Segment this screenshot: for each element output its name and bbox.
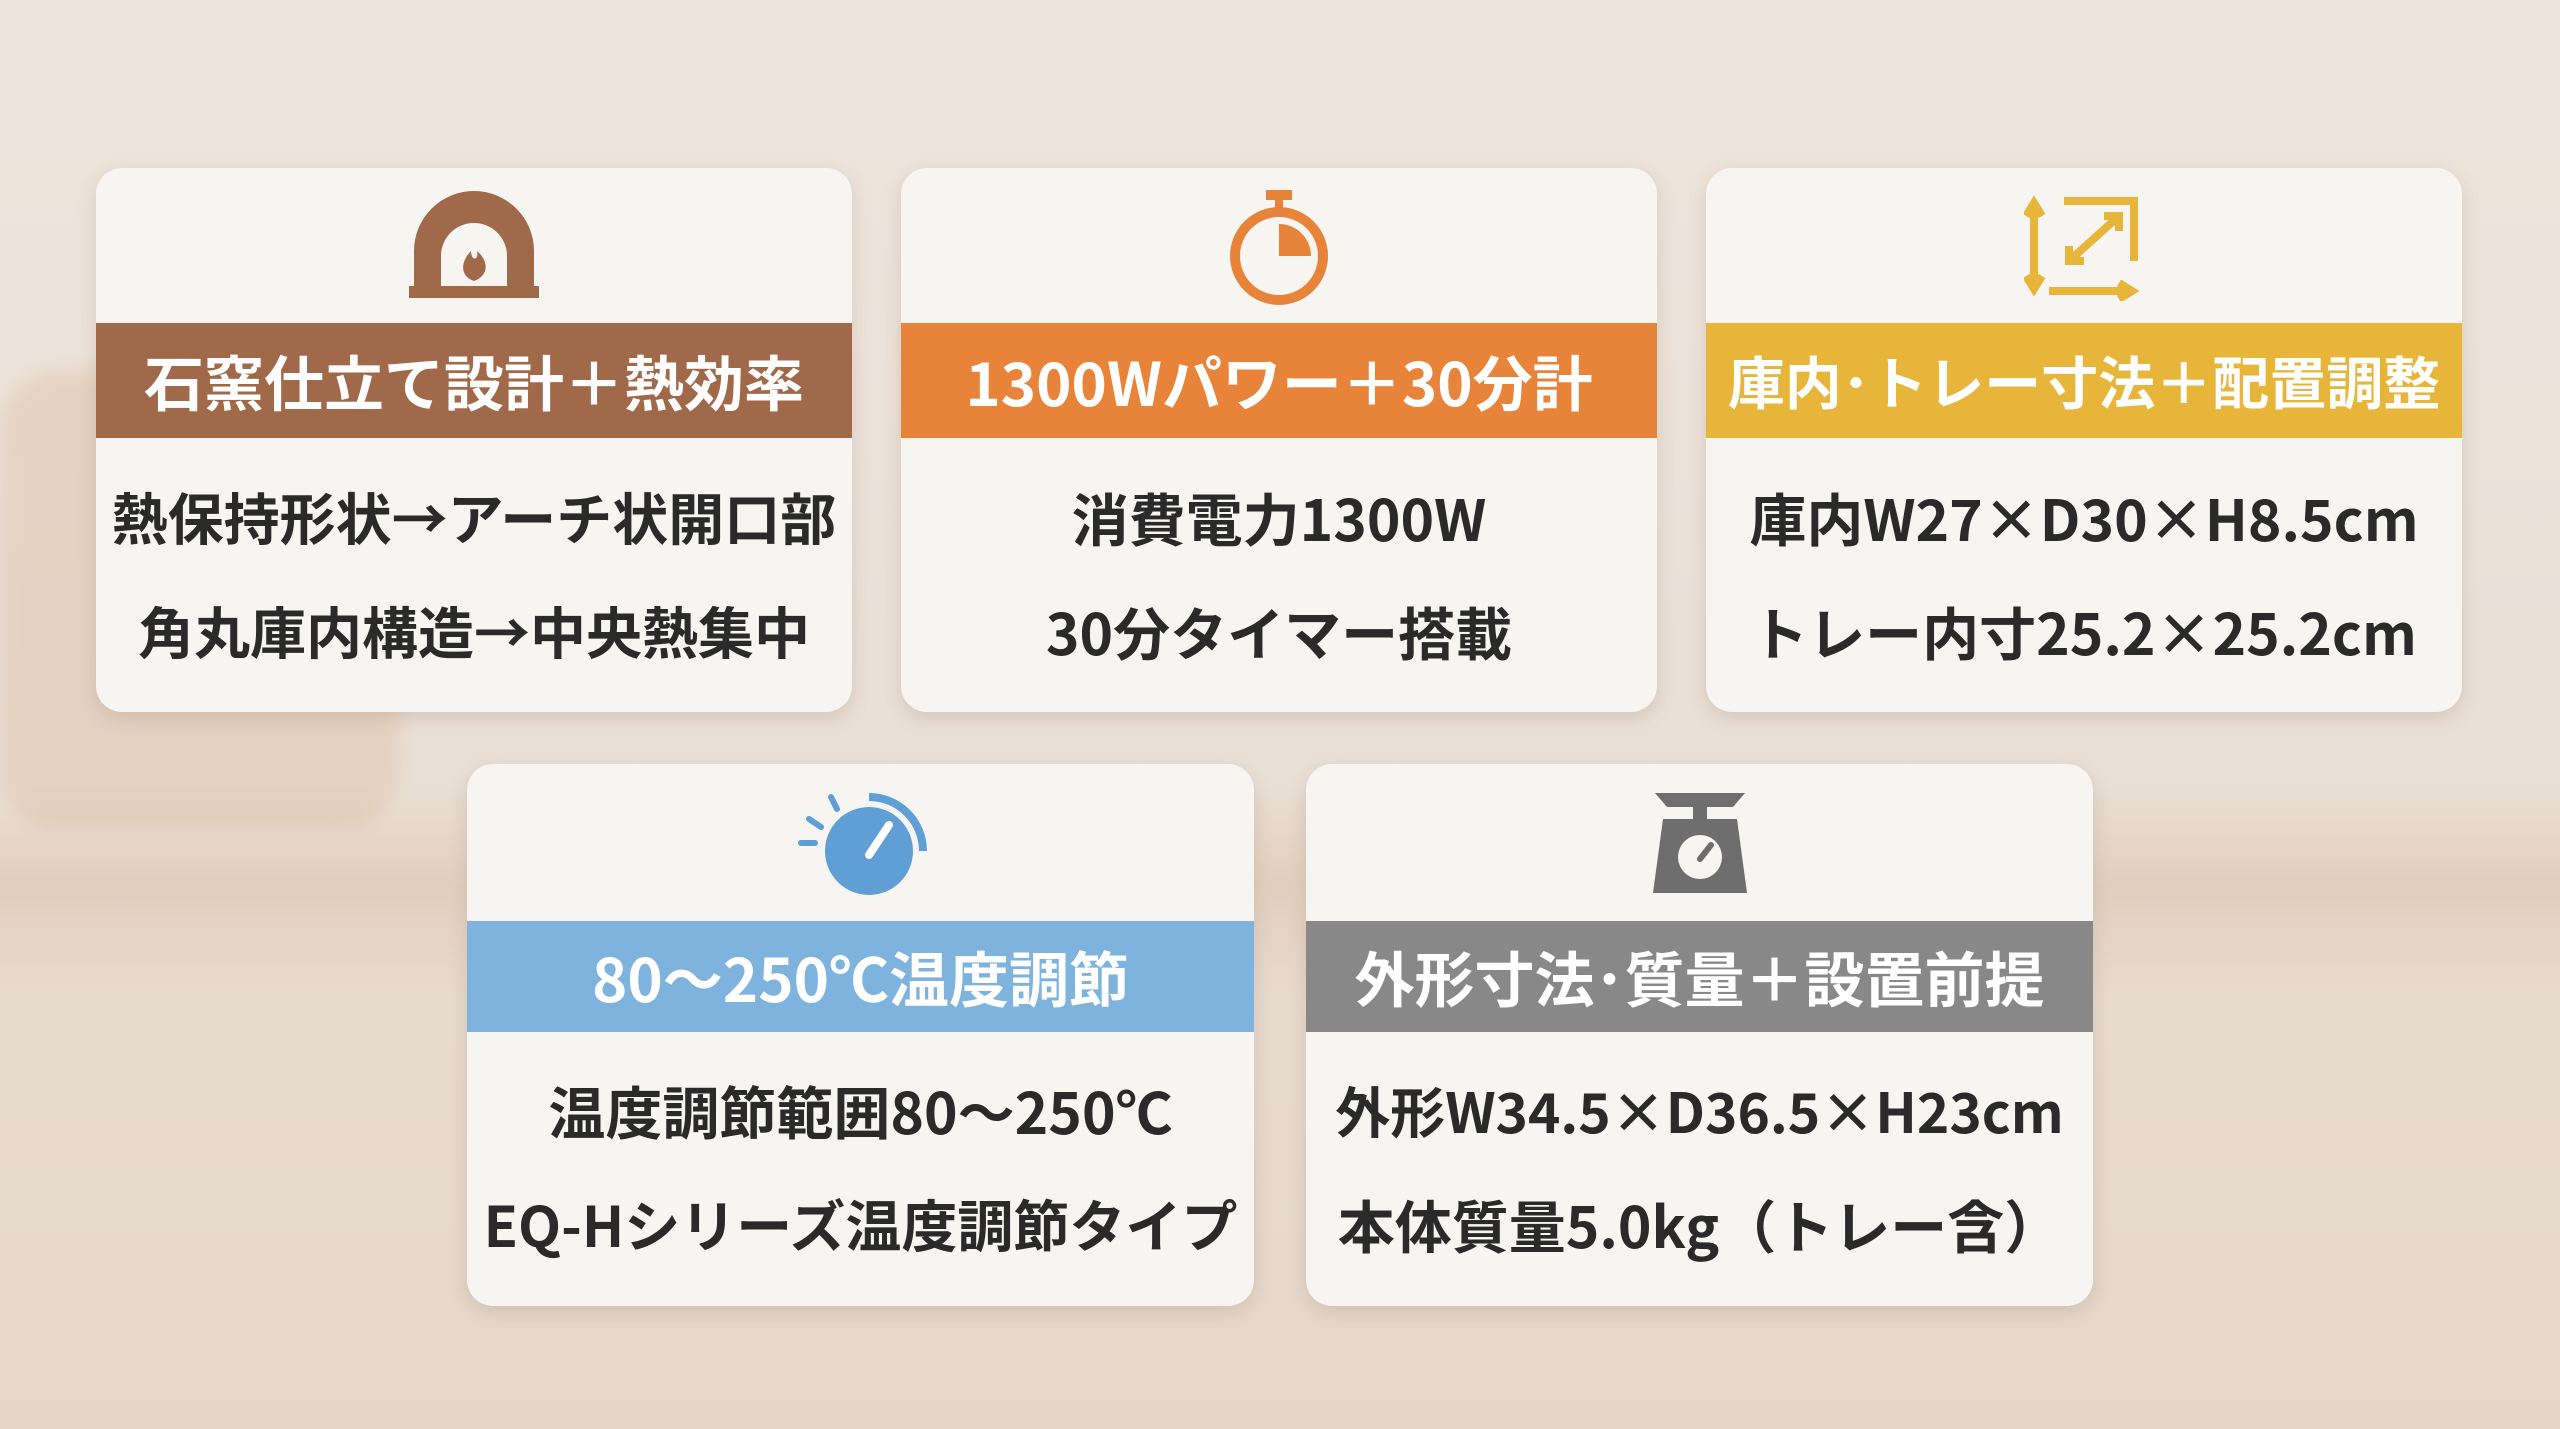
text line 1: 温度調節範囲80〜250℃: [548, 1069, 1173, 1151]
text line 1: 庫内W27×D30×H8.5cm: [1749, 476, 2419, 558]
panel: temperature control: [467, 764, 1254, 1306]
heading band: [467, 921, 1254, 1032]
text line 1: 外形W34.5×D36.5×H23cm: [1335, 1069, 2064, 1149]
text line 1: 消費電力1300W: [1072, 476, 1486, 558]
heading band: [1706, 323, 2462, 438]
heading band: 1300Wパワー＋30分計: [965, 336, 1593, 424]
panel: external dimensions and weight: [1306, 764, 2093, 1306]
background board decoration: [0, 370, 400, 830]
heading band: [901, 323, 1657, 438]
text line 2: トレー内寸25.2×25.2cm: [1751, 590, 2417, 672]
icon: resize arrows: [2024, 196, 2140, 301]
icon: dial gauge: [798, 793, 927, 895]
heading band: [96, 323, 852, 438]
heading band: [1306, 921, 2093, 1032]
text line 2: 角丸庫内構造→中央熱集中: [138, 590, 810, 671]
text line 2: 30分タイマー搭載: [1046, 590, 1512, 672]
icon: stopwatch: [1230, 190, 1328, 305]
panel: interior dimensions: [1706, 168, 2462, 712]
text line 2: EQ-Hシリーズ温度調節タイプ: [484, 1183, 1237, 1264]
heading band: 石窯仕立て設計＋熱効率: [144, 336, 804, 424]
heading band: 外形寸法･質量＋設置前提: [1354, 932, 2044, 1020]
icon: scale: [1653, 793, 1747, 893]
text line 2: 本体質量5.0kg（トレー含）: [1338, 1183, 2061, 1265]
icon: stone oven: [409, 191, 539, 298]
panel: stone oven design: [96, 168, 852, 712]
heading band: 庫内･トレー寸法＋配置調整: [1728, 339, 2440, 421]
heading band: 80〜250℃温度調節: [592, 932, 1129, 1020]
text line 1: 熱保持形状→アーチ状開口部: [112, 476, 836, 557]
panel: power and timer: [901, 168, 1657, 712]
